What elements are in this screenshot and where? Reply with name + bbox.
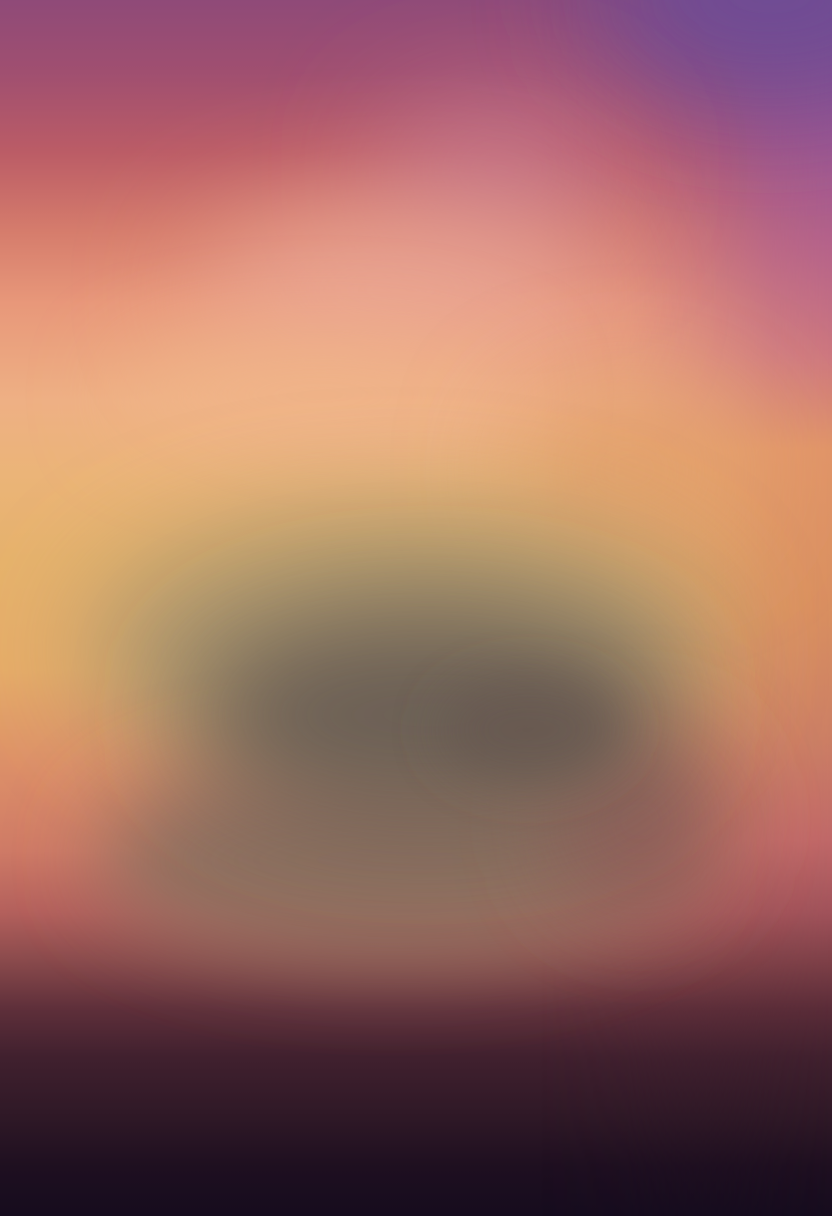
mauve glow: upper center xyxy=(380,100,620,240)
darkest core xyxy=(440,680,620,780)
brown lower mass xyxy=(100,760,680,960)
right column tint xyxy=(640,42,832,983)
pink glow: upper center xyxy=(200,205,600,375)
purple glow: top right xyxy=(590,0,832,90)
peach glow: center xyxy=(120,340,520,450)
reddish brown: lower right of dark shape xyxy=(550,725,730,915)
orange glow: right middle xyxy=(520,400,740,540)
dark central shape xyxy=(190,610,670,820)
olive halo around dark shape xyxy=(90,515,710,785)
